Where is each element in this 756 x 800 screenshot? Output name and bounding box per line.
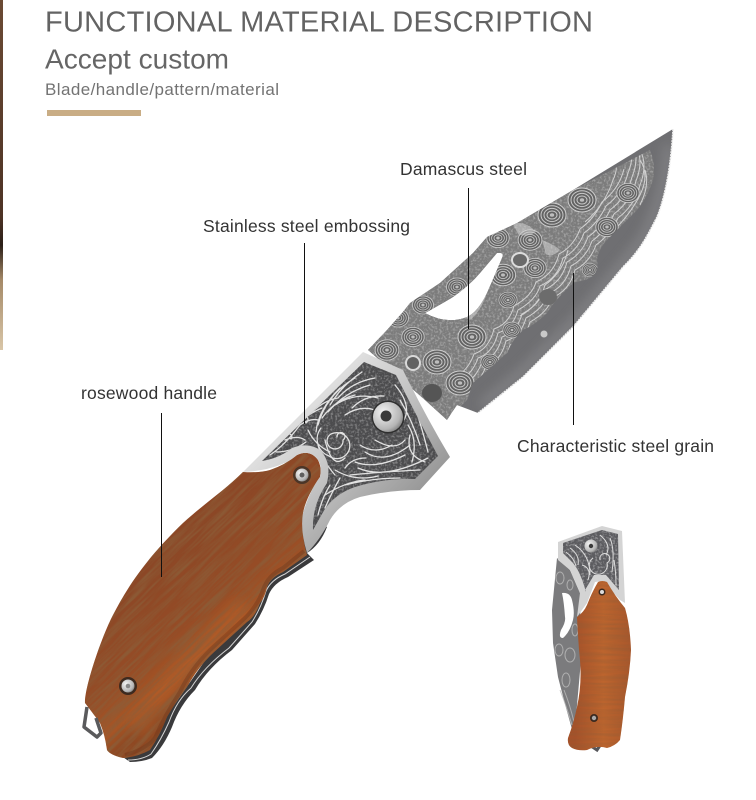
- blade: damascus steel: [360, 129, 673, 420]
- pivot screw: [372, 400, 404, 434]
- bolster: stainless steel embossing: [243, 352, 450, 553]
- small blade: [552, 558, 581, 733]
- small engraving: [563, 530, 619, 592]
- rosette pattern: [375, 183, 639, 402]
- small bolster: [558, 526, 625, 617]
- small handle screws: [590, 588, 606, 722]
- small rosewood handle: [566, 580, 632, 752]
- wavy pattern-welded bands: [463, 154, 648, 388]
- title: FUNCTIONAL MATERIAL DESCRIPTION: [45, 6, 593, 38]
- liner highlight: [128, 557, 310, 760]
- callout: rosewood handle: rosewood handle: [81, 383, 217, 403]
- hamon dot: [540, 330, 548, 338]
- butt screw: [119, 677, 137, 695]
- subtitle: Accept custom: [45, 44, 229, 74]
- bright patches: [455, 223, 560, 320]
- callout: characteristic steel grain: Characteristic steel grain: [517, 436, 714, 456]
- small knife: reverse side view: [552, 526, 632, 752]
- left edge sliver of neighbouring image: [0, 0, 3, 350]
- callout: stainless steel embossing: Stainless steel embossing: [203, 216, 410, 236]
- handle liner: [120, 515, 327, 762]
- accent bar: [47, 110, 141, 116]
- small blade pattern: [555, 572, 578, 725]
- callout: Damascus steel: Damascus steel: [400, 159, 527, 179]
- rear screw: [293, 466, 311, 484]
- serrated bright edge: [478, 129, 673, 413]
- scrollwork: [270, 372, 428, 515]
- lanyard loop: [84, 707, 101, 737]
- small pivot screw: [584, 540, 598, 552]
- main folding knife: [82, 129, 674, 762]
- customisable options: Blade/handle/pattern/material: [45, 80, 279, 99]
- header block: [45, 6, 593, 116]
- engraved recess: [262, 362, 440, 532]
- small lanyard loop: [588, 738, 605, 750]
- handle: rosewood: [84, 452, 321, 758]
